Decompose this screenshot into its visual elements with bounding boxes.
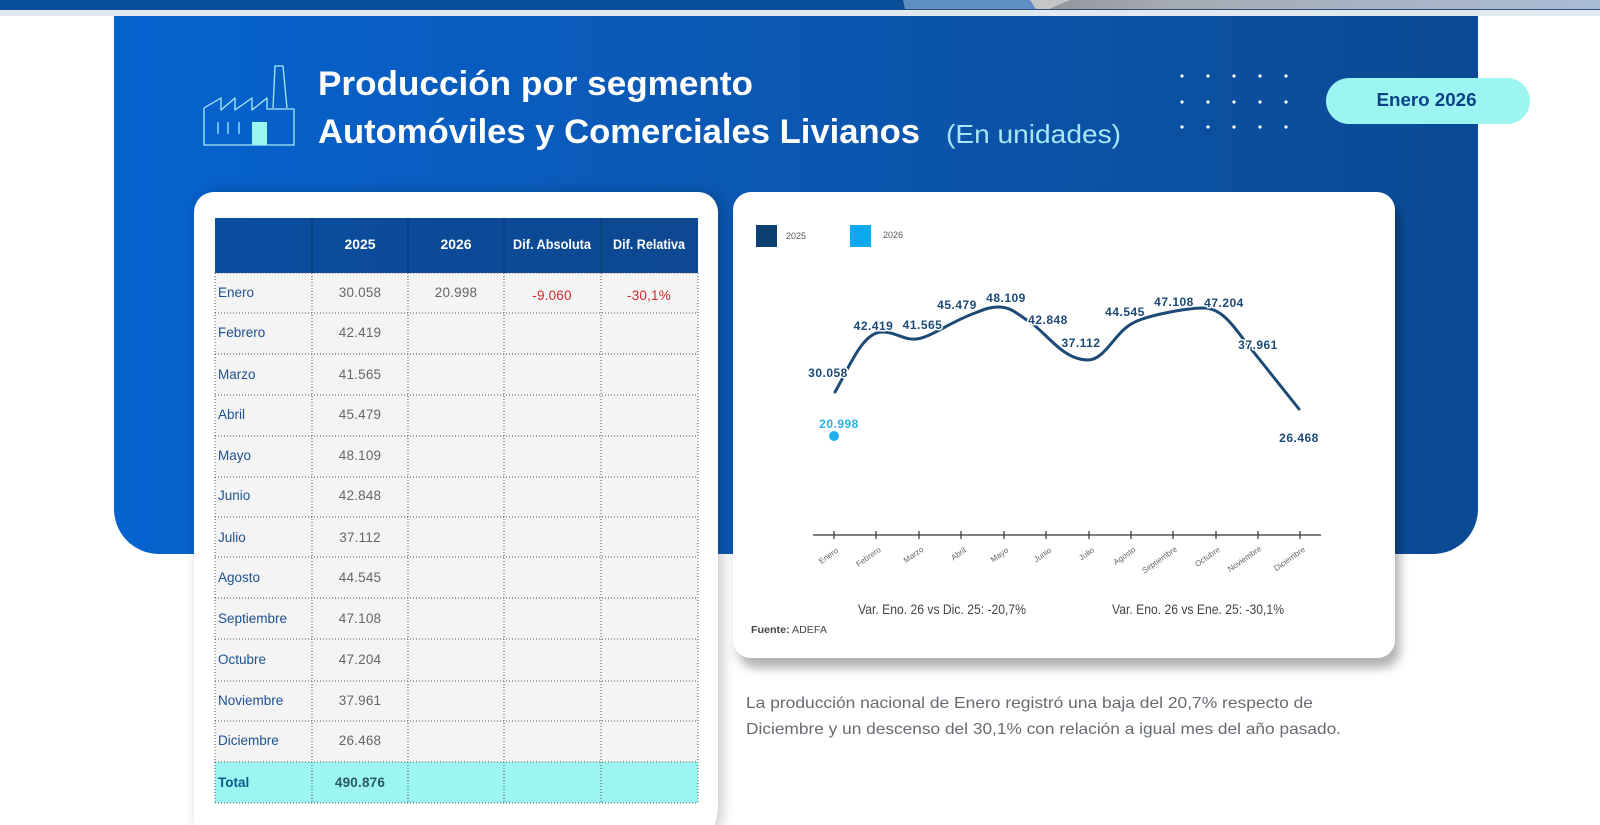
table header: Dif. Absoluta [513,236,591,252]
table header: 2025 [344,236,376,252]
data labels: 37.961 [1238,338,1278,352]
row: Agosto: Agosto [218,570,260,585]
date badge: Enero 2026 [1376,90,1476,110]
row: Total: Total [218,775,249,790]
decorative dot grid [1180,74,1288,129]
month labels: Junio [1032,545,1053,564]
panel: chart card [733,192,1395,658]
summary paragraph [746,695,1341,738]
variation notes: Var. Eno. 26 vs Dic. 25: -20,7% [858,601,1026,617]
row: Febrero: 42.419 [339,325,381,340]
row: Julio: 37.112 [339,530,381,545]
chart legend: 2026 [883,230,903,240]
month labels: Enero [817,546,840,566]
series 2025 line [835,307,1299,409]
row: Agosto: 44.545 [339,570,381,585]
data labels: 47.108 [1154,295,1194,309]
row: Enero [218,285,671,303]
row: Noviembre: 37.961 [339,693,381,708]
data labels: 48.109 [986,291,1026,305]
data labels: 37.112 [1061,336,1101,350]
chart legend: 2025 [786,231,806,241]
subtitle: units: (En unidades) [946,119,1121,149]
month labels: Febrero [855,545,883,569]
row: Enero: -30,1% [627,288,671,303]
row: Junio: 42.848 [339,488,381,503]
month labels [817,544,1307,575]
row: Marzo [218,367,381,382]
month labels: Noviembre [1226,544,1263,574]
row: Abril [218,407,381,422]
month labels: Agosto [1112,545,1138,567]
month labels: Mayo [989,545,1011,564]
top image strip [0,0,1600,16]
data labels: 42.419 [854,319,893,333]
row: Noviembre: Noviembre [218,693,283,708]
row: Mayo: Mayo [218,448,251,463]
data labels: 20.998 [819,417,859,431]
table header [215,218,698,273]
data labels: 30.058 [808,366,848,380]
data labels: 41.565 [903,318,942,332]
row: Julio: Julio [218,530,246,545]
row: Junio: Junio [218,488,250,503]
table header: Dif. Relativa [613,236,685,252]
chart legend [756,225,903,247]
row: Septiembre: 47.108 [339,611,381,626]
month labels: Octubre [1193,545,1222,569]
summary paragraph: Diciembre y un descenso del 30,1% con relación a igual mes del año pasado. [746,721,1341,738]
row: Febrero [218,325,381,340]
row: Junio [218,488,381,503]
row: Enero: -9.060 [532,288,572,303]
data labels: 47.204 [1204,296,1244,310]
title: Automóviles y Comerciales Livianos [318,113,920,151]
month labels: Abril [949,546,968,562]
panel: production table [215,218,698,803]
row: Marzo: 41.565 [339,367,381,382]
icon: factory [204,66,294,145]
month labels: Septiembre [1140,544,1179,575]
summary paragraph: La producción nacional de Enero registró una baja del 20,7% respecto de [746,695,1313,712]
row: Diciembre [218,733,381,748]
variation notes [858,601,1284,617]
row: Octubre: 47.204 [339,652,382,667]
row: Enero: 30.058 [339,285,381,300]
data labels: 26.468 [1279,431,1319,445]
month labels: Diciembre [1272,545,1307,573]
row: Agosto [218,570,381,585]
row: Abril: 45.479 [339,407,381,422]
row: Diciembre: Diciembre [218,733,279,748]
date badge [1326,78,1530,124]
row: Septiembre [218,611,381,626]
row: Abril: Abril [218,407,245,422]
data labels: 44.545 [1105,305,1145,319]
panel: table card [194,192,718,825]
row: Enero: Enero [218,285,254,300]
row: Total [218,775,385,790]
row: Total: 490.876 [335,775,385,790]
title: Producción por segmento [318,65,753,103]
data labels: 42.848 [1028,313,1068,327]
row: Diciembre: 26.468 [339,733,381,748]
x axis [813,531,1321,539]
row: Septiembre: Septiembre [218,611,287,626]
data labels [808,291,1319,445]
row: Octubre: Octubre [218,652,266,667]
month labels: Julio [1077,545,1096,562]
variation notes: Var. Eno. 26 vs Ene. 25: -30,1% [1112,601,1284,617]
row: Octubre [218,652,382,667]
title [318,65,920,151]
row: Julio [218,530,381,545]
row: Enero: 20.998 [435,285,477,300]
series 2026 point [829,431,839,441]
row: Noviembre [218,693,381,708]
line chart [808,291,1321,575]
row: Mayo [218,448,381,463]
row: Febrero: Febrero [218,325,265,340]
data labels: 45.479 [937,298,977,312]
row: Mayo: 48.109 [339,448,381,463]
month labels: Marzo [902,545,926,565]
blue banner [114,16,1478,554]
source: Fuente: ADEFA [751,625,827,636]
row: Marzo: Marzo [218,367,256,382]
table header: 2026 [440,236,472,252]
